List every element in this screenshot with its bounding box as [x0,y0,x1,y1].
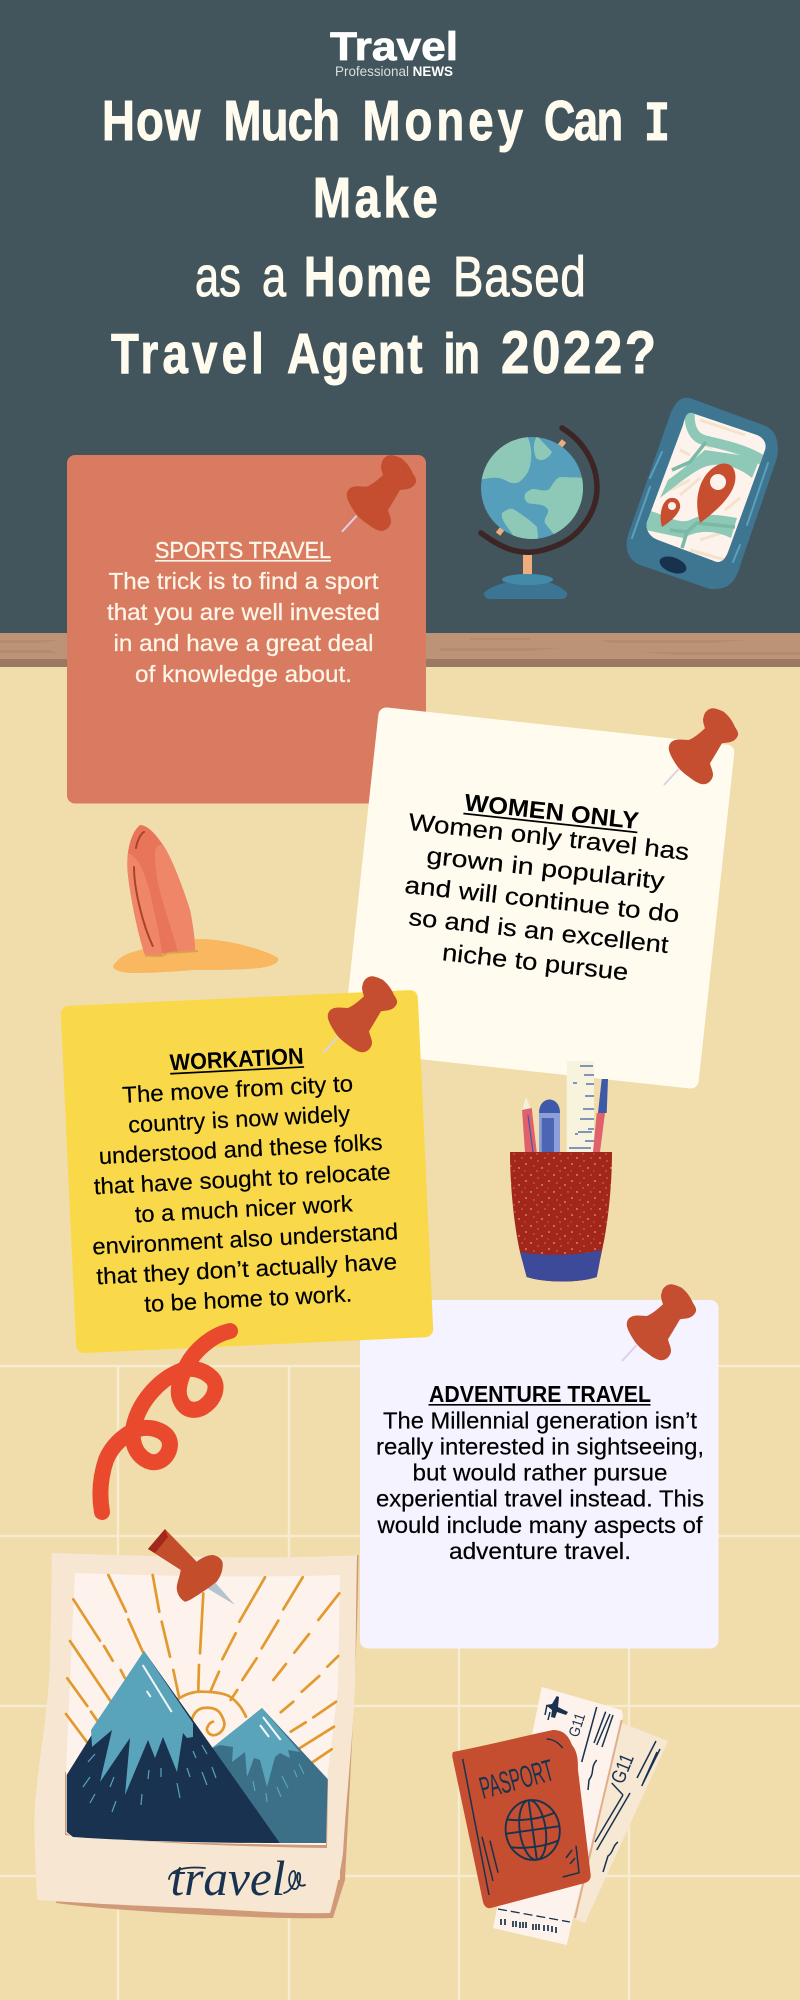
pin on photo [148,1529,235,1605]
body text: women only: and will continue to do [403,872,681,929]
body text: workation: that have sought to relocate [93,1158,391,1199]
body text: workation: The move from city to [122,1070,354,1108]
body text: workation: that they don’t actually have [96,1248,398,1289]
title: Agent [287,321,423,385]
body text: adventure travel: The Millennial generation isn’t [383,1408,698,1434]
icon: pencil cup [510,1061,612,1282]
panel: sports travel [67,455,426,804]
wooden ledge [0,633,800,667]
title: Make [313,165,438,229]
icon: phone map [626,398,778,589]
body text: workation: understood and these folks [98,1129,383,1169]
body text: workation: country is now widely [128,1100,351,1138]
title: in [444,321,480,385]
heading: workation: WORKATION [169,1043,304,1075]
icon: passport and tickets: G11 [566,1711,589,1739]
body text: adventure travel: but would rather pursue [412,1460,668,1486]
body text: workation: to be home to work. [144,1280,353,1317]
title: 2022? [501,319,656,386]
body text: women only: niche to pursue [441,939,630,986]
panel: women only [342,707,735,1089]
logo: Professional NEWS [335,63,453,79]
title [102,88,670,386]
floor background [0,667,800,2000]
mountain highlights [83,1745,304,1812]
wall background [0,0,800,634]
icon: passport and tickets [452,1687,668,1945]
panel: adventure travel [360,1300,718,1648]
icon: red squiggle [100,1331,230,1512]
icon: globe [478,428,597,599]
icon: push pin on women card [664,708,738,785]
body text: adventure travel: experiential travel instead. This [376,1486,704,1512]
body text: women only: so and is an excellent [407,904,670,959]
small mountain [212,1708,328,1843]
title: Can [544,88,623,152]
title: as [195,244,241,308]
logo: Travel [330,25,458,69]
icon: push pin on adventure card [622,1284,696,1361]
title: How [102,88,201,152]
body text: workation: environment also understand [92,1218,399,1260]
plane [546,1696,568,1718]
body text: workation [84,1068,402,1319]
body text: sports travel: in and have a great deal [114,630,374,656]
body text: adventure travel: really interested in sightseeing, [376,1434,704,1460]
title: Based [453,244,586,308]
title: a [262,244,287,308]
heading: women only: WOMEN ONLY [463,789,640,835]
body text: sports travel: of knowledge about. [135,661,352,687]
icon: push pin on sports card [342,455,416,532]
body text: adventure travel: would include many aspects of [376,1512,703,1538]
icon: push pin on workation card [323,976,397,1053]
heading: adventure travel: ADVENTURE TRAVEL [429,1381,651,1407]
icon: surfboard on sand [113,825,278,973]
body text: adventure travel: adventure travel. [449,1538,631,1564]
title: Money [362,88,523,152]
heading: sports travel: SPORTS TRAVEL [155,537,331,563]
floor tile grid [0,1366,800,2000]
polaroid photo [34,1529,358,1918]
sun rays [66,1575,339,1763]
large mountain [67,1651,280,1843]
travel caption: travel [170,1850,286,1906]
passport [452,1730,591,1908]
body text: women only: Women only travel has [407,809,690,866]
body text: sports travel: that you are well invested [107,599,380,625]
icon: passport and tickets: PASPORT [476,1753,557,1806]
panel: workation [60,990,434,1353]
title: I [644,94,670,158]
title: Much [224,88,340,152]
title: Travel [111,321,264,385]
body text: workation: to a much nicer work [134,1190,354,1227]
icon: passport and tickets: G11 [607,1751,639,1787]
body text: women only: grown in popularity [425,843,666,895]
title: Home [304,244,431,308]
body text: sports travel [107,568,380,687]
body text: sports travel: The trick is to find a sport [108,568,379,594]
body text: women only [394,809,690,991]
body text: adventure travel [376,1408,704,1564]
